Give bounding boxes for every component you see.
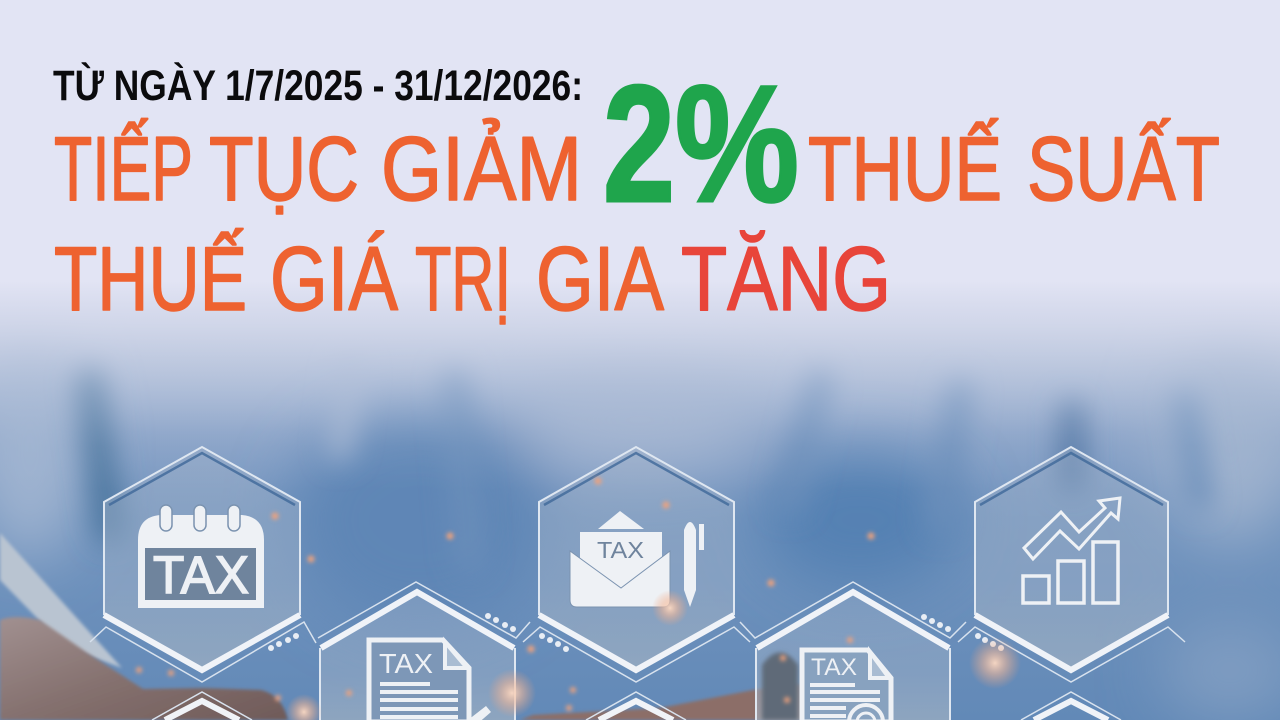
icon: tax calendar: TAX <box>153 546 249 605</box>
date line: TỪ NGÀY 1/7/2025 - 31/12/2026: <box>53 61 583 110</box>
thumb behind glass <box>762 652 798 720</box>
glow sparkles <box>136 478 1021 720</box>
stylus <box>0 533 122 668</box>
big 2% <box>603 52 799 237</box>
hexagon 2: tax document <box>318 582 530 720</box>
hand <box>0 617 288 720</box>
icon: bars <box>1023 542 1118 603</box>
hexagon 5: certified document <box>740 582 966 720</box>
icon: pen <box>684 522 704 607</box>
title: GIẢM <box>381 119 582 220</box>
icon: tax calendar <box>138 505 264 608</box>
title: TĂNG <box>681 229 891 330</box>
title <box>54 118 1220 330</box>
title: THUẾ <box>54 228 247 330</box>
title: THUẾ <box>808 118 1002 220</box>
icon: certified document <box>802 650 891 720</box>
second hand at bottom centre <box>520 684 805 720</box>
dots <box>539 633 569 652</box>
icon: arrow <box>1024 498 1120 559</box>
bottom hexagon tips <box>152 692 1121 720</box>
icon: tax document <box>369 640 491 720</box>
dots <box>975 633 1004 651</box>
hexagon 4: growth chart <box>958 447 1185 682</box>
dots <box>921 614 951 632</box>
hexagon 3: tax envelope and pen <box>523 447 750 682</box>
title: TRỊ <box>415 229 511 330</box>
title: TIẾP <box>54 118 193 220</box>
icon: envelope: TAX <box>597 537 644 563</box>
icon: envelope <box>570 511 670 607</box>
icon: tax document: TAX <box>379 648 433 679</box>
big 2%: % <box>675 52 799 237</box>
title: TỤC <box>209 119 359 220</box>
dots <box>268 633 299 651</box>
title: SUẤT <box>1027 119 1220 220</box>
title: GIÁ <box>270 229 398 330</box>
dots <box>485 613 516 632</box>
hexagon 1: calendar <box>90 447 316 682</box>
icon: certified document: TAX <box>811 654 857 681</box>
big 2%: 2 <box>603 52 675 237</box>
title: GIA <box>536 229 664 330</box>
